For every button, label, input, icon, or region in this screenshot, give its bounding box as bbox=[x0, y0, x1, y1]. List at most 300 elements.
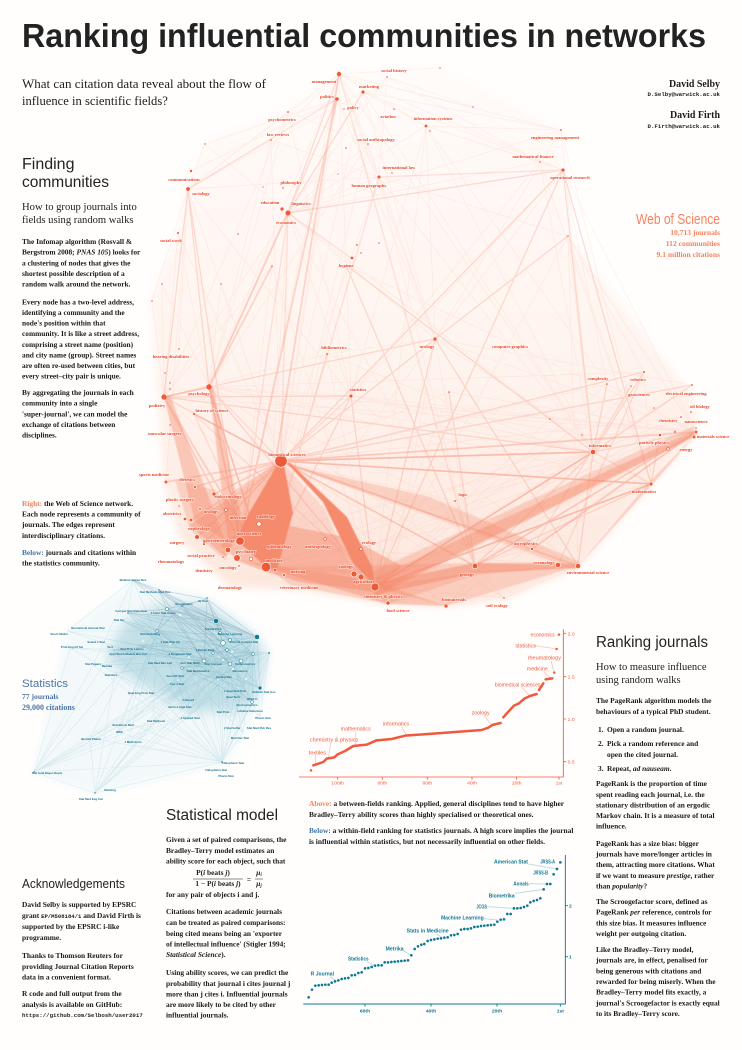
chart 2 x labels: 1st bbox=[557, 1008, 564, 1014]
body paragraphs: exchange of citations between bbox=[22, 420, 115, 429]
statistics network labels: Stat Prob Letters bbox=[120, 647, 144, 651]
body paragraphs: Every node has a two-level address, bbox=[22, 298, 134, 306]
network node labels: dietetics bbox=[179, 477, 195, 482]
statistics network labels: Annals Prob bbox=[204, 627, 222, 631]
statistics legend: Statistics bbox=[22, 678, 69, 690]
chart 1 field labels: zoology bbox=[472, 711, 490, 717]
statistics network labels: Stat Papers bbox=[85, 662, 101, 666]
heading: Statistical model bbox=[166, 807, 278, 824]
network node labels: engineering management bbox=[531, 135, 580, 140]
body text: David Selby is supported by EPSRC bbox=[22, 900, 136, 909]
chart 1 field labels: textiles bbox=[309, 750, 326, 756]
statistics network labels: J Math Econ bbox=[124, 740, 142, 744]
body continued: more than j cites i. Influential journals bbox=[166, 990, 288, 999]
body continued: can be treated as paired comparisons: bbox=[166, 918, 285, 927]
caption: above and below charts: Below: a within-field ranking for statistics journals. A high score implies the journal bbox=[309, 826, 573, 835]
heading: Acknowledgements bbox=[22, 876, 125, 891]
thick edges: biomedical sciences and medicine bbox=[164, 387, 697, 606]
chart 1 field labels: mathematics bbox=[341, 727, 371, 733]
chart 2 journal labels: Machine Learning bbox=[441, 916, 484, 922]
panel: acknowledgements bbox=[22, 876, 143, 1019]
statistics legend bbox=[22, 678, 75, 712]
chart 1 field labels bbox=[309, 633, 561, 756]
statistics network labels: Stat Eng bbox=[104, 788, 116, 792]
statistics network labels: Statistics bbox=[105, 673, 118, 677]
network node labels: hygiene bbox=[339, 263, 353, 268]
body text: being generous with citations and bbox=[596, 966, 702, 975]
network node labels: rheumatology bbox=[158, 559, 185, 564]
chart 2 x labels: 60th bbox=[360, 1008, 370, 1014]
network node labels: linguistics bbox=[291, 201, 311, 206]
chart 1 x labels: 60th bbox=[422, 781, 432, 787]
network node labels: communications bbox=[168, 177, 200, 182]
body text: stationary distribution of an ergodic bbox=[596, 801, 711, 810]
chart 1 x labels: 20th bbox=[512, 781, 522, 787]
statistics network labels: Can J Stat bbox=[170, 682, 184, 686]
network node labels: politics bbox=[320, 94, 334, 99]
network node labels: social work bbox=[160, 238, 182, 243]
subheading: using random walks bbox=[596, 675, 681, 686]
network node labels: informatics bbox=[589, 443, 611, 448]
network node labels: social practice bbox=[187, 553, 215, 558]
body text: if we want to measure prestige, rather bbox=[596, 871, 714, 880]
statistics network nodes bbox=[33, 589, 270, 794]
statistics network labels: Multivar Behav Res bbox=[120, 578, 147, 582]
network node labels: psychiatry bbox=[236, 549, 257, 554]
body text: 1. bbox=[598, 725, 604, 734]
body intro: ability score for each object, such that bbox=[166, 856, 286, 866]
formula: i bbox=[260, 873, 262, 878]
formula bbox=[193, 868, 263, 889]
caption: above and below charts: Bradley–Terry ability scores than highly specialised or theoretical ones. bbox=[309, 810, 534, 819]
body paragraphs: identifying a community and the bbox=[22, 308, 125, 317]
network node labels: endocrinology bbox=[214, 494, 242, 499]
authors: D.Selby@warwick.ac.uk bbox=[648, 91, 721, 98]
chart 2 journal labels: R Journal bbox=[311, 972, 334, 978]
network node labels: marketing bbox=[359, 84, 380, 89]
body text: to its Bradley–Terry score. bbox=[596, 1009, 680, 1018]
network node labels: soil ecology bbox=[486, 603, 509, 608]
body continued: of intellectual influence' (Stigler 1994; bbox=[166, 940, 286, 949]
formula: = bbox=[247, 875, 251, 884]
statistics network labels: Stat Med Res Lett bbox=[148, 661, 172, 665]
network node labels: statistics bbox=[350, 387, 366, 392]
network node labels: food science bbox=[386, 608, 410, 613]
chart 1 axes bbox=[299, 629, 566, 780]
repository URL: https://github.com/Selbosh/user2017 bbox=[22, 1012, 143, 1019]
network node labels: information systems bbox=[414, 116, 453, 121]
heading: Finding bbox=[22, 156, 74, 173]
network node labels: social anthropology bbox=[357, 137, 396, 142]
chart 2 x labels: 20th bbox=[492, 1008, 502, 1014]
network node labels: oceanology bbox=[533, 560, 555, 565]
body paragraphs: Bergstrom 2008; PNAS 105) looks for bbox=[22, 248, 140, 257]
caption: right and below: interdisciplinary citations. bbox=[22, 531, 105, 540]
chart 2 dots bbox=[309, 862, 560, 997]
network node labels bbox=[139, 68, 729, 613]
statistics network labels: J Stat Softw bbox=[224, 726, 241, 730]
network node labels: chemistry & physics bbox=[364, 594, 403, 599]
network node labels: sociology bbox=[192, 191, 210, 196]
formula: j bbox=[259, 884, 262, 889]
Web of Science legend bbox=[636, 212, 720, 259]
subtitle question: influence in scientific fields? bbox=[22, 94, 168, 108]
body paragraphs: The Infomap algorithm (Rosvall & bbox=[22, 237, 132, 246]
body text: open the cited journal. bbox=[607, 750, 678, 759]
body text: supported by the EPSRC i-like bbox=[22, 922, 120, 931]
chart 2 y labels bbox=[569, 904, 572, 961]
chart 2 x labels bbox=[360, 1008, 564, 1014]
Web of Science legend: 9.1 million citations bbox=[656, 250, 720, 259]
chart 1 field labels: statistics bbox=[515, 644, 536, 650]
body text: than popularity? bbox=[596, 882, 647, 890]
body text: Thanks to Thomson Reuters for bbox=[22, 951, 124, 960]
statistics network labels: Technometrics bbox=[235, 662, 256, 666]
statistics network labels: J Amer Stat Assoc bbox=[150, 611, 176, 615]
chart 2 journal labels: American Stat bbox=[494, 859, 528, 865]
body text: grant EP/M508184/1 and David Firth is bbox=[22, 911, 141, 920]
body text: Like the Bradley–Terry model, bbox=[596, 945, 694, 954]
chart 2 axes bbox=[303, 855, 568, 1007]
statistics network labels: Lifetime Data Anal bbox=[237, 709, 263, 713]
body text: The Scroogefactor score, defined as bbox=[596, 897, 708, 906]
network node labels: philosophy bbox=[280, 180, 302, 185]
network node labels: veterinary medicine bbox=[280, 585, 318, 590]
authors bbox=[648, 78, 721, 130]
Web of Science legend: 112 communities bbox=[666, 239, 720, 248]
title: Ranking influential communities in networks bbox=[22, 17, 706, 54]
statistics network labels: J Applied Stat bbox=[180, 716, 200, 720]
chart 1 field labels: chemistry & physics bbox=[310, 737, 359, 743]
network nodes bbox=[151, 67, 698, 608]
body intro: Given a set of paired comparisons, the bbox=[166, 835, 287, 844]
chart 1 y labels: 1.5 bbox=[568, 675, 575, 681]
body paragraphs: shortest possible description of a bbox=[22, 269, 125, 278]
network node labels: urology bbox=[420, 344, 435, 349]
chart 2 journal labels: Annals bbox=[513, 882, 529, 888]
chart 1 x labels: 1st bbox=[556, 781, 563, 787]
body paragraphs: node's position within that bbox=[22, 319, 106, 328]
network node labels: sports medicine bbox=[139, 472, 169, 477]
body text: R code and full output from the bbox=[22, 989, 122, 998]
body text: rewarded for being miserly. When the bbox=[596, 977, 716, 986]
network node labels: muscular surgery bbox=[148, 431, 183, 436]
statistics legend: 77 journals bbox=[22, 692, 59, 701]
network node labels: economics bbox=[276, 220, 296, 225]
statistics network labels: Stat Biosci Med bbox=[112, 723, 134, 727]
network node labels: environmental science bbox=[567, 570, 609, 575]
statistics network labels: Machine Learning bbox=[218, 632, 243, 636]
subheading: How to measure influence bbox=[596, 662, 707, 673]
chart 2 journal labels: Biometrika bbox=[489, 893, 515, 899]
body continued: Using ability scores, we can predict the bbox=[166, 968, 289, 977]
Web of Science legend: Web of Science bbox=[636, 212, 720, 228]
body text: 3. bbox=[598, 764, 604, 773]
chart: within-field ranking bbox=[303, 855, 572, 1014]
body continued: are more likely to be cited by other bbox=[166, 1000, 277, 1009]
body continued: influential journals. bbox=[166, 1011, 229, 1020]
chart 1 field labels: biomedical sciences bbox=[495, 683, 541, 689]
chart 1 x labels: 40th bbox=[467, 781, 477, 787]
network node labels: psychometrics bbox=[268, 117, 296, 122]
chart 2 journal labels: Statistics bbox=[348, 957, 369, 963]
statistics network labels: Pharm Stat bbox=[255, 716, 271, 720]
caption: above and below charts: Above: a between-fields ranking. Applied, general disciplines tend to have higher bbox=[309, 799, 564, 808]
network node labels: robotics bbox=[630, 377, 646, 382]
body text: programme. bbox=[22, 933, 61, 942]
chart 1 y labels: 2.0 bbox=[568, 631, 575, 637]
body paragraphs: comprising a street name (position) bbox=[22, 340, 134, 349]
body text: PageRank has a size bias: bigger bbox=[596, 839, 700, 848]
network node labels: biomaterials bbox=[442, 597, 466, 602]
network node labels: infection bbox=[230, 515, 247, 520]
dense cluster tint bbox=[106, 604, 265, 712]
body paragraphs: disciplines. bbox=[22, 431, 57, 440]
network node labels: policy bbox=[347, 105, 359, 110]
chart 1 field labels: rheumatology bbox=[528, 656, 561, 662]
network node labels: education bbox=[261, 200, 280, 205]
network node labels: human geography bbox=[352, 183, 387, 188]
chart 1 y labels: 1.0 bbox=[568, 717, 575, 723]
body text: journal's Scroogefactor is exactly equal bbox=[595, 998, 720, 1007]
body intro: Bradley–Terry model estimates an bbox=[166, 846, 274, 855]
statistics network labels: Appl Stoch Models Bus Ind bbox=[109, 652, 147, 656]
network node labels: psychology bbox=[188, 391, 210, 396]
chart 1 x labels bbox=[331, 781, 563, 787]
network node labels: aviation bbox=[380, 114, 396, 119]
body paragraphs: 'super-journal', we can model the bbox=[22, 409, 128, 418]
body paragraphs: By aggregating the journals in each bbox=[22, 388, 134, 397]
chart 2 x labels: 40th bbox=[426, 1008, 436, 1014]
network node labels: medicine bbox=[265, 558, 283, 563]
statistics network labels: J Biopharm Stat bbox=[205, 768, 227, 772]
network node labels: nursing bbox=[291, 569, 306, 574]
chart 2 journal labels: Stats in Medicine bbox=[407, 929, 449, 935]
formula: P(i beats j) bbox=[196, 868, 230, 877]
body text: data in a convenient format. bbox=[22, 973, 111, 982]
body text: this size bias. It measures influence bbox=[596, 918, 707, 927]
statistics network labels: J Stat Plan Inf bbox=[160, 640, 180, 644]
statistics network labels bbox=[32, 578, 276, 801]
network node labels: complexity bbox=[588, 376, 609, 381]
network node labels: international law bbox=[383, 165, 416, 170]
body text: Pick a random reference and bbox=[607, 739, 699, 748]
body continued: Citations between academic journals bbox=[166, 907, 282, 916]
body text: influence. bbox=[596, 822, 627, 831]
caption: right and below: Below: journals and citations within bbox=[22, 548, 136, 557]
network node labels: obstetrics bbox=[163, 511, 181, 516]
statistics network labels: Metrika bbox=[102, 664, 112, 668]
statistics network labels: Bulletin Stat Soc bbox=[253, 690, 276, 694]
chart 2 journal labels bbox=[311, 859, 555, 978]
body continued: probability that journal i cites journal j bbox=[166, 979, 290, 988]
statistics network labels: Qual Eng Prob Stat bbox=[128, 691, 154, 695]
chart 2 y labels: 2 bbox=[569, 904, 572, 910]
network node labels: geosciences bbox=[628, 392, 650, 397]
network node labels: agriculture bbox=[353, 579, 375, 584]
statistics network labels: Comput Stat Data Anal bbox=[115, 609, 147, 613]
network node labels: history of science bbox=[196, 408, 228, 413]
body text: Repeat, ad nauseam. bbox=[607, 764, 672, 773]
body text: behaviours of a typical PhD student. bbox=[596, 707, 711, 716]
body paragraphs: every street–city pair is unique. bbox=[22, 372, 121, 381]
authors: David Selby bbox=[669, 78, 720, 90]
body text: The PageRank algorithm models the bbox=[596, 696, 712, 705]
body paragraphs: are often re-used between cities, but bbox=[22, 361, 136, 370]
network node labels: dermatology bbox=[218, 585, 243, 590]
body text: PageRank per reference, controls for bbox=[596, 908, 711, 917]
network node labels: particle physics bbox=[639, 440, 669, 445]
statistics network labels: Scand J Stat bbox=[87, 640, 105, 644]
body text: Bradley–Terry model fits exactly, a bbox=[596, 988, 707, 997]
body text: Markov chain. It is a measure of total bbox=[596, 811, 715, 820]
body paragraphs: and city name (group). Street names bbox=[22, 350, 136, 359]
body text: journals are, in effect, penalised for bbox=[595, 956, 708, 965]
chart 2 y labels: 1 bbox=[569, 955, 572, 961]
statistics network labels: Stat Methods bbox=[147, 719, 165, 723]
statistics network labels: Aust NZ Stat bbox=[166, 674, 184, 678]
statistics network labels: Int Stat Rev bbox=[216, 675, 232, 679]
body paragraphs: community. It is like a street address, bbox=[22, 329, 139, 338]
statistics network labels: Qual Tech bbox=[226, 695, 240, 699]
network node labels: plastic surgery bbox=[166, 497, 195, 502]
chart 1 field labels: economics bbox=[531, 633, 555, 639]
Web of Science legend: 10,713 journals bbox=[670, 228, 720, 237]
statistics network labels: Stat Methods Med Res bbox=[140, 590, 171, 594]
network node labels: podiatry bbox=[149, 403, 166, 408]
network background haze bbox=[150, 67, 697, 607]
chart 1 x labels: 100th bbox=[331, 781, 344, 787]
statistics network labels: JSS bbox=[117, 730, 123, 734]
statistics network labels: Stoch Model bbox=[50, 632, 68, 636]
caption: right and below: Right: the Web of Science network. bbox=[22, 499, 133, 508]
body paragraphs: community into a single bbox=[22, 399, 98, 408]
statistics network labels: Bj Stat bbox=[198, 599, 208, 603]
network node labels: geology bbox=[460, 572, 475, 577]
network node labels: urology bbox=[204, 509, 219, 514]
statistics network labels: Prob Eng Inf Sci bbox=[61, 645, 83, 649]
network node labels: computer graphics bbox=[492, 344, 528, 349]
network node labels: astrophysics bbox=[514, 541, 538, 546]
statistics network labels: J Classif bbox=[182, 698, 194, 702]
formula: μ bbox=[256, 868, 260, 877]
statistics network labels: Ann Stat Math bbox=[180, 661, 200, 665]
formula: 1 − P(i beats j) bbox=[195, 879, 241, 888]
authors: David Firth bbox=[670, 109, 720, 121]
statistics network labels: Biometrical Journal Stat bbox=[71, 626, 105, 630]
subheading: fields using random walks bbox=[22, 215, 134, 226]
network node labels: materials science bbox=[697, 434, 729, 439]
subtitle question: What can citation data reveal about the flow of bbox=[22, 77, 267, 91]
heading: Ranking journals bbox=[596, 634, 708, 651]
panel: ranking journals text bbox=[595, 634, 722, 1018]
body paragraphs: random walk around the network. bbox=[22, 280, 131, 289]
subheading: How to group journals into bbox=[22, 202, 137, 213]
statistics network labels: Stat Med Pub Res bbox=[247, 726, 272, 730]
authors: D.Firth@warwick.ac.uk bbox=[648, 123, 721, 130]
network node labels: hearing disabilities bbox=[153, 354, 189, 359]
body text: them, attracting more citations. What bbox=[596, 860, 715, 869]
statistics network labels: Biostatistics bbox=[175, 602, 193, 606]
caption: right and below: Each node represents a community of bbox=[22, 510, 141, 519]
statistics network labels: J Biopharm Stat bbox=[222, 761, 244, 765]
statistics network labels: J Nonparam Stat bbox=[169, 652, 192, 656]
panel: statistical model text bbox=[166, 807, 292, 1020]
statistics network labels: Stat Sci bbox=[114, 618, 124, 622]
caption: above and below charts: is influential within statistics, but not necessarily influential on other fields. bbox=[309, 837, 545, 846]
network node labels: management bbox=[312, 79, 337, 84]
statistics network labels: Biometrics bbox=[233, 669, 248, 673]
panel: statistics network bbox=[22, 578, 276, 801]
network node labels: nephrology bbox=[188, 526, 211, 531]
body text: PageRank is the proportion of time bbox=[596, 779, 708, 788]
caption: right and below: the statistics community. bbox=[22, 559, 100, 568]
heading: communities bbox=[22, 174, 109, 191]
chart 1 y labels: 0.5 bbox=[568, 760, 575, 766]
network node labels: ecology bbox=[362, 540, 377, 545]
statistics network labels: Stat Prob bbox=[217, 710, 230, 714]
network node labels: logic bbox=[458, 492, 468, 497]
statistics network labels: Stat Comput bbox=[204, 662, 222, 666]
statistics network labels: Environmetrics bbox=[236, 703, 258, 707]
statistics network labels: Biom J Appl Stat bbox=[168, 705, 192, 709]
chart 2 journal labels: JCGS bbox=[476, 905, 487, 911]
body continued: being cited means being an 'exporter bbox=[166, 929, 283, 938]
statistics network haze bbox=[33, 578, 270, 795]
statistics network labels: Stat Med Eng Inst bbox=[79, 797, 103, 801]
faint citation edges bbox=[152, 68, 696, 606]
body text: providing Journal Citation Reports bbox=[22, 962, 134, 971]
network node labels: surgery bbox=[170, 540, 185, 545]
network node labels: law reviews bbox=[267, 132, 289, 137]
chart: between-fields ranking bbox=[299, 629, 575, 787]
body text: analysis is available on GitHub: bbox=[22, 1000, 122, 1009]
network node labels: zoology bbox=[339, 564, 354, 569]
network node labels: gastroenterology bbox=[203, 538, 236, 543]
body continued: for any pair of objects i and j. bbox=[166, 890, 259, 899]
chart 1 leader lines bbox=[316, 645, 557, 765]
chart 1 x labels: 80th bbox=[377, 781, 387, 787]
network node labels: mathematical finance bbox=[512, 154, 554, 159]
network node labels: neuroscience bbox=[237, 531, 261, 536]
statistics network labels: Stat Anal Bayes Repts bbox=[32, 771, 63, 775]
network node labels: oil biology bbox=[690, 404, 711, 409]
chart 1 y labels bbox=[568, 631, 575, 766]
network node labels: operational research bbox=[550, 175, 590, 180]
network node labels: electrical engineering bbox=[665, 391, 707, 396]
network node labels: nanoscience bbox=[684, 419, 708, 424]
statistics network labels: Stat Neerlandica bbox=[187, 669, 210, 673]
statistics network labels: Med Dec Stat bbox=[231, 736, 249, 740]
body text: spent reading each journal, i.e. the bbox=[596, 790, 705, 799]
statistics network labels: J Appl Stat Prob bbox=[224, 689, 246, 693]
network node labels: social history bbox=[381, 68, 407, 73]
statistics network labels: Pharm Stat bbox=[218, 774, 234, 778]
chart 1 field labels: medicine bbox=[527, 667, 548, 673]
chart 2 leader lines bbox=[330, 864, 557, 981]
chart 1 dots bbox=[311, 635, 559, 770]
statistics network edges bbox=[34, 580, 269, 793]
body text: weight per outgoing citation. bbox=[596, 929, 686, 938]
body text: 2. bbox=[598, 739, 604, 748]
network node labels: energy bbox=[680, 447, 693, 452]
network node labels: biomedical sciences bbox=[268, 452, 306, 457]
chart 2 journal labels: JRSS-B bbox=[533, 871, 548, 877]
statistics network labels: Biostat Pharm bbox=[81, 737, 101, 741]
network node labels: anthropology bbox=[305, 544, 332, 549]
body text: journals have more/longer articles in bbox=[595, 850, 712, 858]
formula: μ bbox=[256, 879, 260, 888]
